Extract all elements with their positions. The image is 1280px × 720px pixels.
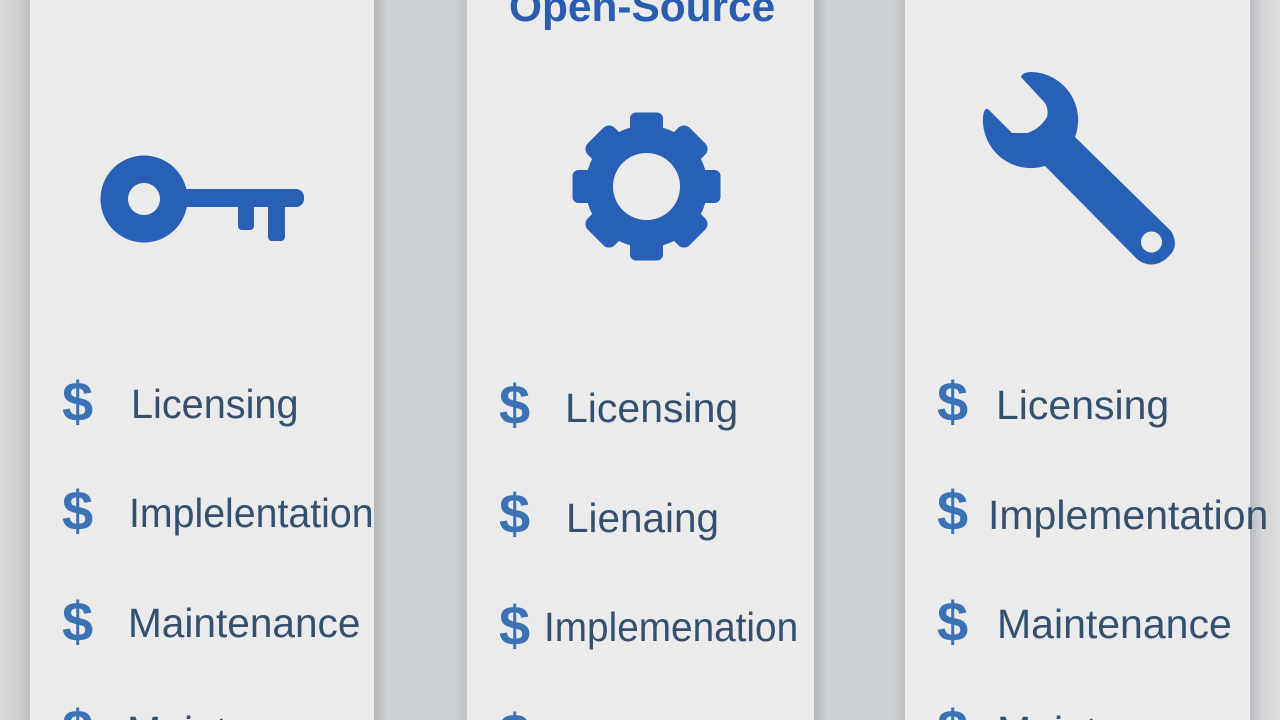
icon: gear <box>572 112 720 260</box>
label: implementation: Implemenation <box>544 604 798 650</box>
label: maintenance: Maintenance <box>997 601 1232 647</box>
icon: key <box>100 156 304 242</box>
label: licensing: Licensing <box>131 381 299 427</box>
dollar icon: licensing: $ <box>62 370 93 433</box>
dollar icon: maintenance: $ <box>62 590 93 653</box>
dollar icon: implementation: $ <box>62 479 93 542</box>
panel: proprietary column <box>30 0 374 720</box>
dollar icon: licensing: $ <box>499 373 530 436</box>
panel: self-hosted column <box>905 0 1268 720</box>
label: licensing: Licensing <box>996 382 1169 428</box>
icon: wrench <box>982 72 1175 264</box>
dollar icon: licensing: $ <box>937 370 968 433</box>
label: maintenance: Maintenance <box>128 600 360 646</box>
label: implementation: Implementation <box>988 492 1268 538</box>
label: licensing: Licensing <box>565 385 738 431</box>
dollar icon: implementation: $ <box>499 594 530 657</box>
dollar icon: implementation: $ <box>937 479 968 542</box>
label: implementation: Implelentation <box>129 490 374 536</box>
panel: open-source column <box>467 0 814 720</box>
label: second row: Lienaing <box>566 495 719 541</box>
dollar icon: maintenance: $ <box>937 590 968 653</box>
dollar icon: second row: $ <box>499 482 530 545</box>
